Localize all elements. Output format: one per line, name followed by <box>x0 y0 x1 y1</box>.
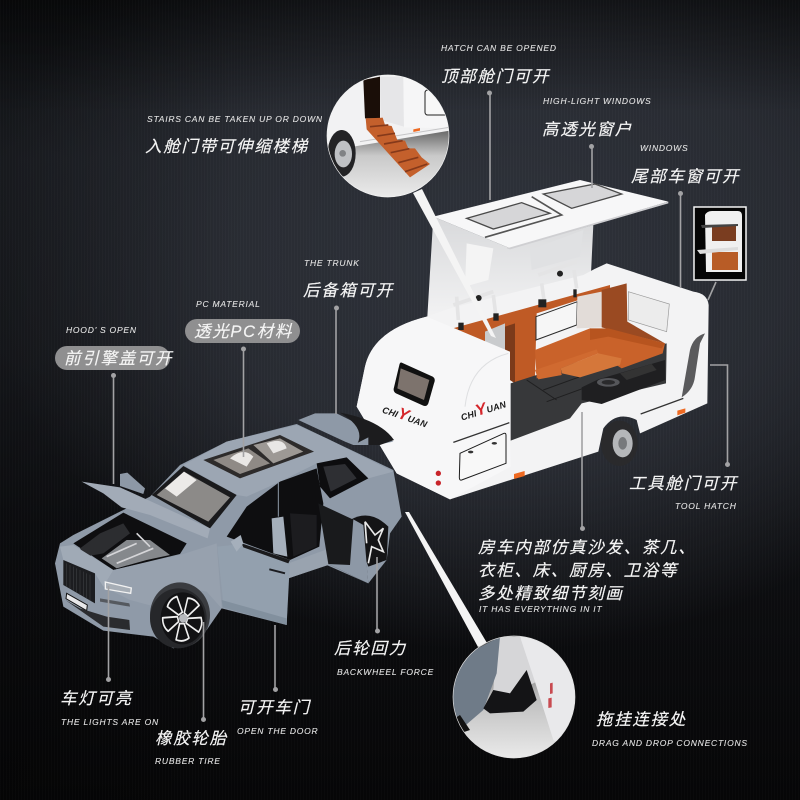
caravan cabinet with sink <box>582 360 665 404</box>
caravan hatch underside <box>427 217 593 317</box>
caravan sofa <box>535 328 665 379</box>
detail circle: hitch connection <box>452 636 576 758</box>
pointer wedge: hitch detail <box>405 512 487 647</box>
callout: tool hatch: 工具舱门可开 <box>629 475 739 493</box>
pill: PC material label background <box>185 319 300 343</box>
callout: lights: 车灯可亮 <box>60 690 134 708</box>
detail circle: stairs <box>326 74 450 198</box>
callout: high-light windows: HIGH-LIGHT WINDOWS <box>543 96 651 106</box>
callout: hood open: 前引擎盖可开 <box>64 350 174 368</box>
callout: PC material: PC MATERIAL <box>196 299 261 309</box>
callout: lights <box>60 586 159 727</box>
SUV lower bumper <box>65 600 130 630</box>
hatch window 1 <box>467 203 550 229</box>
pointer wedge: stairs detail <box>413 189 496 338</box>
SUV headlight <box>105 582 131 593</box>
callout: the trunk: THE TRUNK <box>304 258 360 268</box>
caravan front window <box>394 363 435 406</box>
callout: tool hatch <box>629 365 739 511</box>
callout: rubber tire: 橡胶轮胎 <box>155 730 228 748</box>
callout: backwheel force <box>334 557 434 677</box>
pill: hood label background <box>55 346 170 370</box>
caravan hinges <box>453 262 577 320</box>
SUV front grille <box>63 560 95 603</box>
callout: hood open <box>64 325 174 484</box>
callout: hitch: 拖挂连接处 <box>596 711 687 729</box>
SUV rear wheel <box>350 515 388 567</box>
callout: high-light windows <box>542 96 651 188</box>
SUV main body <box>55 424 402 648</box>
callout: open the door: 可开车门 <box>238 699 312 717</box>
SUV windscreen <box>152 466 237 528</box>
SUV sunroof <box>203 435 314 478</box>
hatch window 2 <box>543 184 622 208</box>
caravan logo front: CHIYUAN <box>380 400 430 431</box>
callout: stairs <box>145 114 323 156</box>
caravan front panel <box>357 317 511 499</box>
callout: stairs: STAIRS CAN BE TAKEN UP OR DOWN <box>147 114 323 124</box>
SUV trunk lid <box>298 413 393 445</box>
callout: interior details: 多处精致细节刻画 <box>478 585 624 603</box>
caravan floor <box>511 343 667 441</box>
SUV front wheel <box>150 582 210 648</box>
callout: backwheel force: BACKWHEEL FORCE <box>337 667 434 677</box>
caravan front hatch <box>459 433 506 480</box>
callout: open the door <box>237 625 318 736</box>
caravan hatch lid <box>433 180 668 248</box>
callout: rear windows <box>631 143 741 288</box>
callout: stairs: 入舱门带可伸缩楼梯 <box>145 138 309 156</box>
SUV open hood <box>82 482 210 538</box>
callout: hatch can be opened: HATCH CAN BE OPENED <box>441 43 557 53</box>
callout: interior details <box>478 412 696 614</box>
callout: tool hatch: TOOL HATCH <box>675 501 737 511</box>
callout: hood open: HOOD’ S OPEN <box>66 325 137 335</box>
SUV number plate <box>66 593 87 611</box>
SUV rear door open <box>318 503 368 583</box>
callout: high-light windows: 高透光窗户 <box>542 121 633 139</box>
caravan interior back wall <box>447 285 610 383</box>
illustration: grey SUV with open doors <box>55 413 402 648</box>
callout: rubber tire <box>155 622 228 766</box>
callout: PC material: 透光PC材料 <box>194 323 293 341</box>
callout: rear windows: 尾部车窗可开 <box>631 168 741 186</box>
callout: PC material <box>194 299 293 457</box>
callout: interior details: 房车内部仿真沙发、茶几、 <box>478 539 696 557</box>
caravan wheel <box>601 421 638 466</box>
SUV engine bay <box>73 513 187 570</box>
callout: the trunk <box>303 258 395 414</box>
callout: the trunk: 后备箱可开 <box>303 282 395 300</box>
callout: rubber tire: RUBBER TIRE <box>155 756 221 766</box>
callout: open the door: OPEN THE DOOR <box>237 726 318 736</box>
stair steps <box>366 118 430 177</box>
callout: rear windows: WINDOWS <box>640 143 688 153</box>
SUV front fender <box>103 543 222 608</box>
caravan side markers <box>514 408 685 479</box>
callout: interior details: 衣柜、床、厨房、卫浴等 <box>478 562 679 580</box>
callout: hatch can be opened: 顶部舱门可开 <box>441 68 551 86</box>
SUV front door open <box>217 517 290 625</box>
caravan interior window <box>536 302 577 340</box>
caravan side swoosh <box>682 333 705 397</box>
SUV roof <box>183 425 393 497</box>
caravan table <box>561 353 622 377</box>
callout: backwheel force: 后轮回力 <box>334 640 407 658</box>
detail inset: rear windows <box>694 207 746 300</box>
callout: lights: THE LIGHTS ARE ON <box>61 717 159 727</box>
SUV cabin interior <box>227 468 323 560</box>
caravan taillights <box>436 471 441 486</box>
callout: hitch: DRAG AND DROP CONNECTIONS <box>592 738 748 748</box>
callout: hatch can be opened <box>441 43 557 200</box>
callout: interior details: IT HAS EVERYTHING IN IT <box>479 604 602 614</box>
caravan logo side: CHIYUAN <box>458 394 508 424</box>
illustration: caravan trailer <box>357 180 709 499</box>
caravan body shell <box>357 263 709 499</box>
SUV rear window <box>317 457 368 498</box>
callout: hitch <box>592 711 748 748</box>
